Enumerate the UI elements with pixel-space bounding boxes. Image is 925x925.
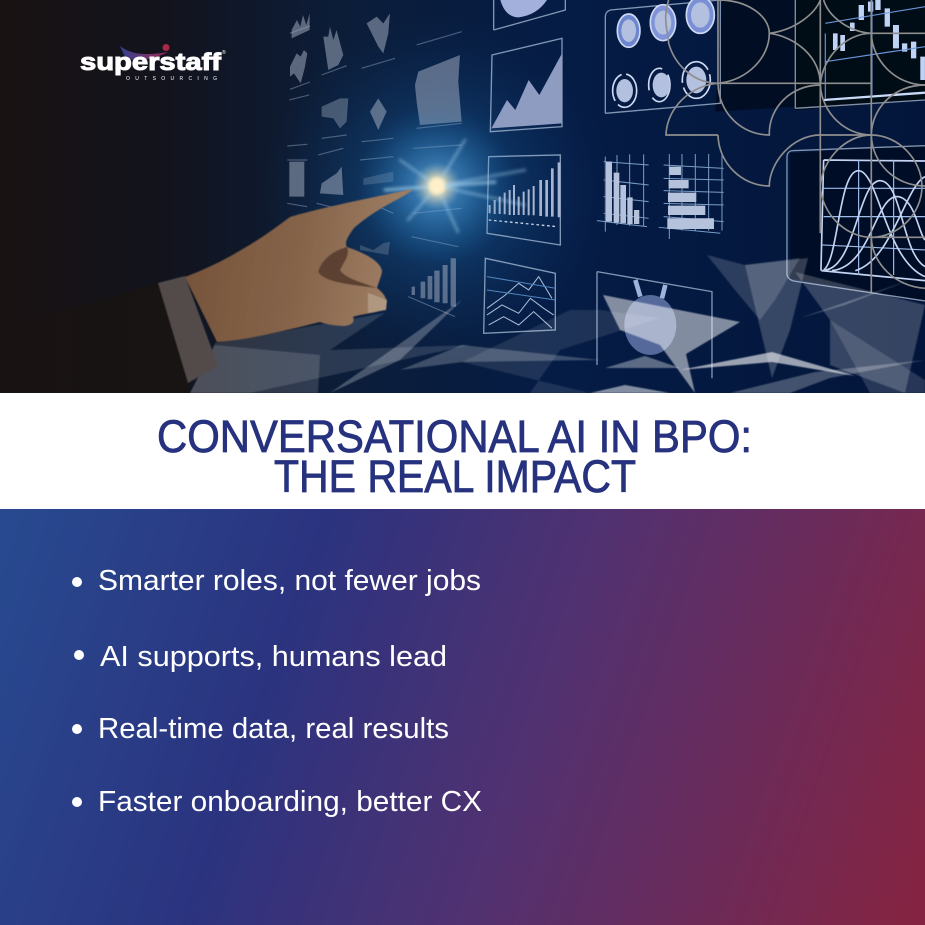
top right black panels <box>715 0 795 112</box>
bar chart panel one <box>489 162 560 217</box>
bullet 1: Smarter roles, not fewer jobs <box>98 565 481 597</box>
speech bubble line art <box>666 0 925 293</box>
bullet 2: AI supports, humans lead <box>100 641 447 673</box>
jacket sleeve <box>0 283 190 393</box>
donut gauges <box>613 0 714 107</box>
low poly translucent triangles <box>190 255 925 393</box>
line curve chart <box>821 160 925 281</box>
title band <box>0 393 925 509</box>
hand pointing at screen <box>158 189 413 383</box>
logo dot <box>162 44 170 51</box>
logo swoosh <box>120 46 168 60</box>
pie shape <box>500 0 547 17</box>
glow behind screen <box>262 15 612 365</box>
bullet 3: Real-time data, real results <box>98 713 449 745</box>
candlesticks <box>833 0 925 80</box>
star glow at fingertip <box>357 106 525 266</box>
gradient bullet panel <box>0 509 925 925</box>
logo <box>80 44 226 82</box>
dashboard panels left of the hand tip <box>287 13 462 317</box>
title line two: THE REAL IMPACT <box>274 451 636 502</box>
registered mark: ® <box>222 49 226 56</box>
two bar charts <box>597 154 724 239</box>
bullet 4: Faster onboarding, better CX <box>98 786 482 818</box>
title line one: CONVERSATIONAL AI IN BPO: <box>157 411 752 462</box>
wave lines chart <box>487 277 555 328</box>
round machine icon <box>624 295 676 355</box>
hero photo panel <box>0 0 925 393</box>
logo tagline: OUTSOURCING <box>126 76 217 82</box>
right side dashboard panels <box>484 0 925 378</box>
logo wordmark: superstaff <box>80 49 222 76</box>
area chart <box>491 53 562 128</box>
